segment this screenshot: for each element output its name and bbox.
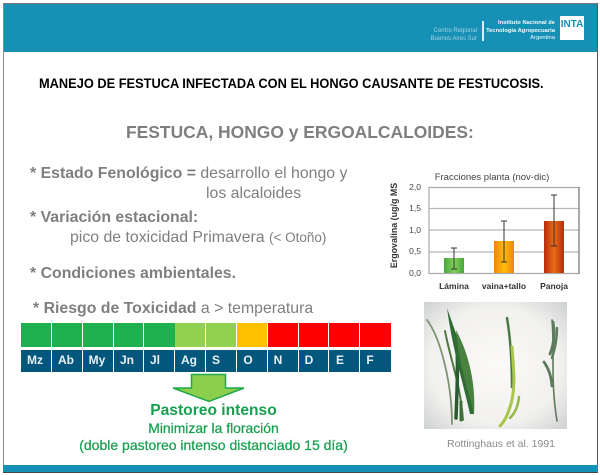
y axis labels: 2,0 <box>409 182 421 192</box>
text: S <box>212 353 220 367</box>
institute name: Argentina <box>530 35 555 41</box>
text: Jn <box>120 353 134 367</box>
subtitle: FESTUCA, HONGO y ERGOALCALOIDES: <box>126 122 474 142</box>
arrow: down to recommendation <box>172 374 244 402</box>
text: estado fenologico: * Estado Fenológico = desarrollo el hongo y <box>30 165 347 182</box>
institute name <box>486 20 555 41</box>
recommendation line 1: Minimizar la floración <box>148 420 279 436</box>
y axis labels: 1,0 <box>409 225 421 235</box>
x axis labels <box>439 281 568 291</box>
x axis labels: Lámina <box>439 281 469 291</box>
risk colour bar <box>21 323 391 347</box>
text: F <box>366 353 374 367</box>
panicle <box>544 320 557 421</box>
text: N <box>274 353 282 367</box>
y axis labels: 0,0 <box>409 268 421 278</box>
right page edge <box>597 3 598 473</box>
text: variacion estacional: pico de toxicidad Primavera (< Otoño) <box>70 229 326 246</box>
institute name: Tecnología Agropecuaria <box>486 28 555 34</box>
header band <box>3 3 598 52</box>
leaves <box>427 320 463 424</box>
text: My <box>89 353 105 367</box>
photo credit: Rottinghaus et al. 1991 <box>447 438 555 450</box>
text: variacion estacional: * Variación estacional: <box>30 209 198 226</box>
regional centre label <box>431 28 477 42</box>
text: Mz <box>27 353 43 367</box>
INTA logo: INTA <box>561 19 583 30</box>
photo: festuca plant fractions <box>424 302 567 429</box>
institute name: Instituto Nacional de <box>498 20 555 26</box>
text: D <box>305 353 313 367</box>
text: variacion estacional <box>30 209 326 246</box>
bar: Panoja <box>544 221 564 273</box>
risk calendar <box>21 323 391 372</box>
INTA logo <box>560 16 584 40</box>
x axis labels: Panoja <box>540 281 568 291</box>
month strip <box>21 350 391 372</box>
bar: Lamina <box>444 258 464 273</box>
text: Ag <box>181 353 197 367</box>
text: E <box>336 353 344 367</box>
text: estado fenologico: los alcaloides <box>206 185 301 202</box>
left page edge <box>3 3 4 473</box>
footer band <box>3 465 598 473</box>
text: riesgo de toxicidad: * Riesgo de Toxicidad a > temperatura <box>33 300 313 317</box>
header separator <box>482 21 484 41</box>
x axis labels: vaina+tallo <box>482 281 526 291</box>
regional centre label: Centro Regional <box>434 28 477 34</box>
text: Ab <box>58 353 74 367</box>
stem <box>500 318 519 426</box>
bar chart: ergovalina <box>389 172 580 291</box>
title: MANEJO DE FESTUCA INFECTADA CON EL HONGO CAUSANTE DE FESTUCOSIS. <box>39 75 544 91</box>
text: estado fenologico <box>30 165 348 202</box>
text: O <box>243 353 253 367</box>
recommendation line 2: (doble pastoreo intenso distanciado 15 día) <box>79 437 348 453</box>
text: condiciones ambientales: * Condiciones ambientales. <box>30 265 236 282</box>
y axis labels: 1,5 <box>409 203 421 213</box>
chart title: Fracciones planta (nov-dic) <box>435 172 549 183</box>
bar: vaina+tallo <box>494 241 514 273</box>
text: Jl <box>150 353 160 367</box>
y axis labels: 0,5 <box>409 246 421 256</box>
recommendation heading: Pastoreo intenso <box>150 402 277 419</box>
regional centre label: Buenos Aires Sur <box>431 36 477 42</box>
y axis labels <box>409 182 421 278</box>
y axis title: Ergovalina (ug/g MS <box>389 183 399 268</box>
